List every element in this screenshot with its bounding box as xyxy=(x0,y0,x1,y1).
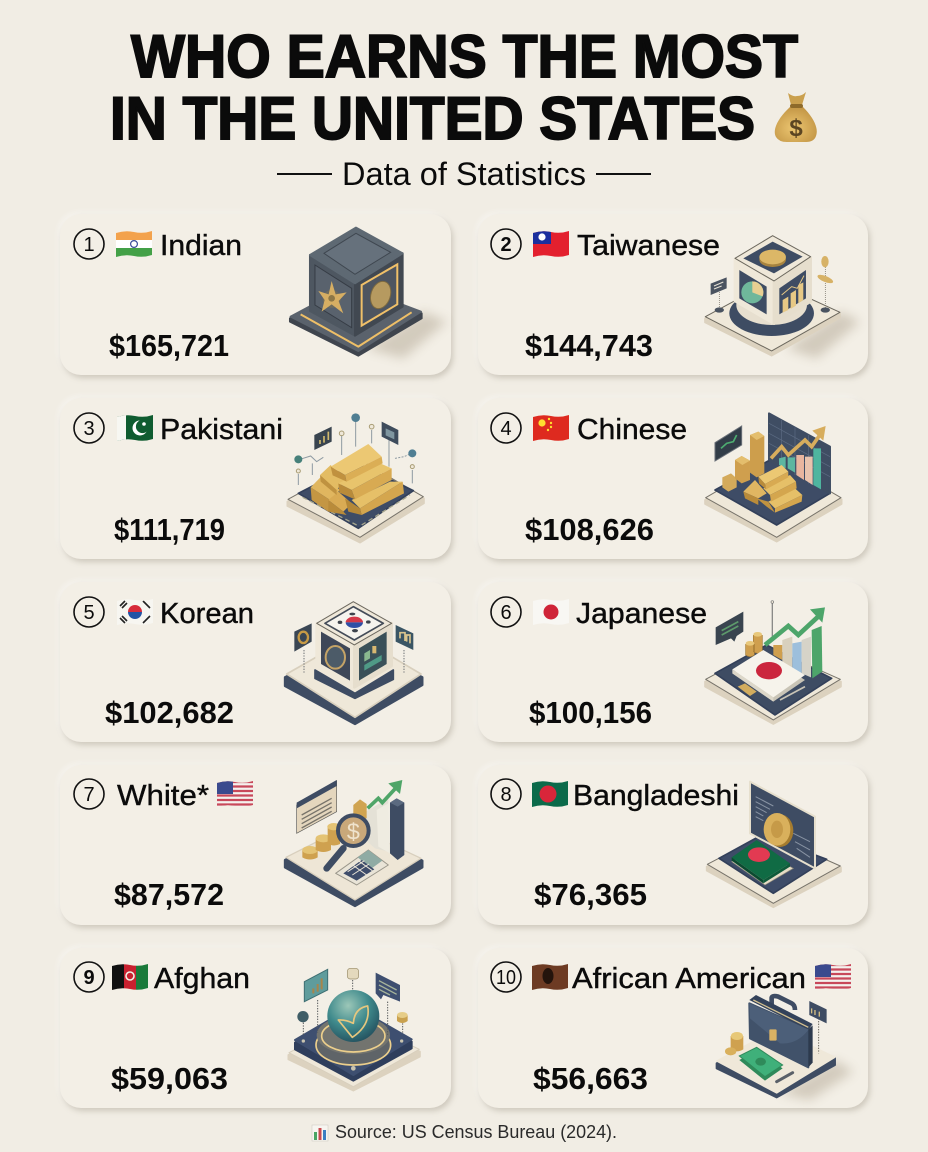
icon: money bag: $ xyxy=(789,115,803,142)
rank badge 7 xyxy=(74,779,104,809)
rank badge 7: 7 xyxy=(83,784,95,806)
icon: Korean data cube xyxy=(285,602,422,724)
rank badge 8 xyxy=(491,779,521,809)
name: Korean xyxy=(160,598,254,630)
salary: $111,719 xyxy=(114,512,225,547)
title: WHO EARNS THE MOST xyxy=(131,23,798,90)
source text: Source: US Census Bureau (2024). xyxy=(335,1122,617,1142)
flag: South Korea xyxy=(117,598,153,626)
rank badge 6: 6 xyxy=(500,602,512,624)
name: Indian xyxy=(160,230,242,262)
icon: bar chart xyxy=(312,1125,328,1141)
rank badge 6 xyxy=(491,597,521,627)
salary: $76,365 xyxy=(534,877,647,912)
title: IN THE UNITED STATES xyxy=(110,85,755,152)
flag: Japan xyxy=(533,598,569,626)
name: Afghan xyxy=(154,963,250,995)
salary: $100,156 xyxy=(529,695,652,730)
title xyxy=(110,23,798,152)
name: Taiwanese xyxy=(577,230,720,262)
icon: Japan growth chart xyxy=(705,601,841,724)
rank badge 5: 5 xyxy=(83,602,95,624)
name: Bangladeshi xyxy=(573,780,739,812)
rank badge 5 xyxy=(74,597,104,627)
flag: China xyxy=(533,414,569,442)
rank badge 2 xyxy=(491,229,521,259)
panel: rank 5 Korean xyxy=(60,582,451,742)
salary: $165,721 xyxy=(109,328,229,363)
flag: brown flag xyxy=(532,963,568,991)
panel: rank 3 Pakistani xyxy=(60,398,451,559)
icon: briefcase and cash xyxy=(717,995,853,1100)
flag: United States xyxy=(815,964,851,989)
rank badge 10 xyxy=(491,962,521,992)
panel: rank 4 Chinese xyxy=(478,398,868,559)
icon: money bag xyxy=(775,92,817,142)
subtitle: Data of Statistics xyxy=(342,156,586,192)
rank badge 4: 4 xyxy=(500,418,512,440)
flag: Bangladesh xyxy=(532,780,568,808)
flag: India xyxy=(116,230,152,258)
flag: United States xyxy=(217,781,253,806)
rank badge 8: 8 xyxy=(500,784,512,806)
salary: $87,572 xyxy=(114,877,224,912)
salary: $56,663 xyxy=(533,1061,648,1096)
rank badge 3: 3 xyxy=(83,418,95,440)
rank badge 3 xyxy=(74,413,104,443)
rank badge 4 xyxy=(491,413,521,443)
flag: Taiwan xyxy=(533,230,569,258)
rank badge 9: 9 xyxy=(83,967,95,989)
rank badge 1: 1 xyxy=(83,234,95,256)
panel: rank 9 Afghan xyxy=(60,948,451,1108)
salary: $102,682 xyxy=(105,695,234,730)
name: White* xyxy=(117,780,209,812)
icon: analysis desk xyxy=(285,780,422,906)
name: Chinese xyxy=(577,414,687,446)
panel: rank 2 Taiwanese xyxy=(478,214,868,375)
source footer xyxy=(312,1122,617,1142)
icon: vault safe xyxy=(290,228,447,358)
salary: $108,626 xyxy=(525,512,654,547)
panel: rank 6 Japanese xyxy=(478,582,868,742)
rank badge 9 xyxy=(74,962,104,992)
rank badge 10: 10 xyxy=(496,967,516,989)
icon: gold bars xyxy=(287,413,424,543)
panel: rank 8 Bangladeshi xyxy=(478,765,868,925)
name: African American xyxy=(572,963,806,995)
panel: rank 10 African American xyxy=(478,948,868,1108)
icon: Bangladesh book and coin xyxy=(707,782,841,907)
panel: rank 1 Indian xyxy=(60,214,451,375)
name: Pakistani xyxy=(160,414,283,446)
salary: $59,063 xyxy=(111,1061,228,1096)
rank badge 1 xyxy=(74,229,104,259)
salary: $144,743 xyxy=(525,328,653,363)
icon: data cube xyxy=(705,236,860,358)
icon: analysis desk: $ xyxy=(347,818,360,844)
flag: Pakistan xyxy=(117,414,153,442)
name: Japanese xyxy=(576,598,707,630)
icon: glowing globe xyxy=(288,968,420,1091)
rank badge 2: 2 xyxy=(500,234,512,256)
icon: gold and bar chart xyxy=(705,413,842,542)
panel: rank 7 White xyxy=(60,765,451,925)
flag: Afghanistan xyxy=(112,963,148,991)
